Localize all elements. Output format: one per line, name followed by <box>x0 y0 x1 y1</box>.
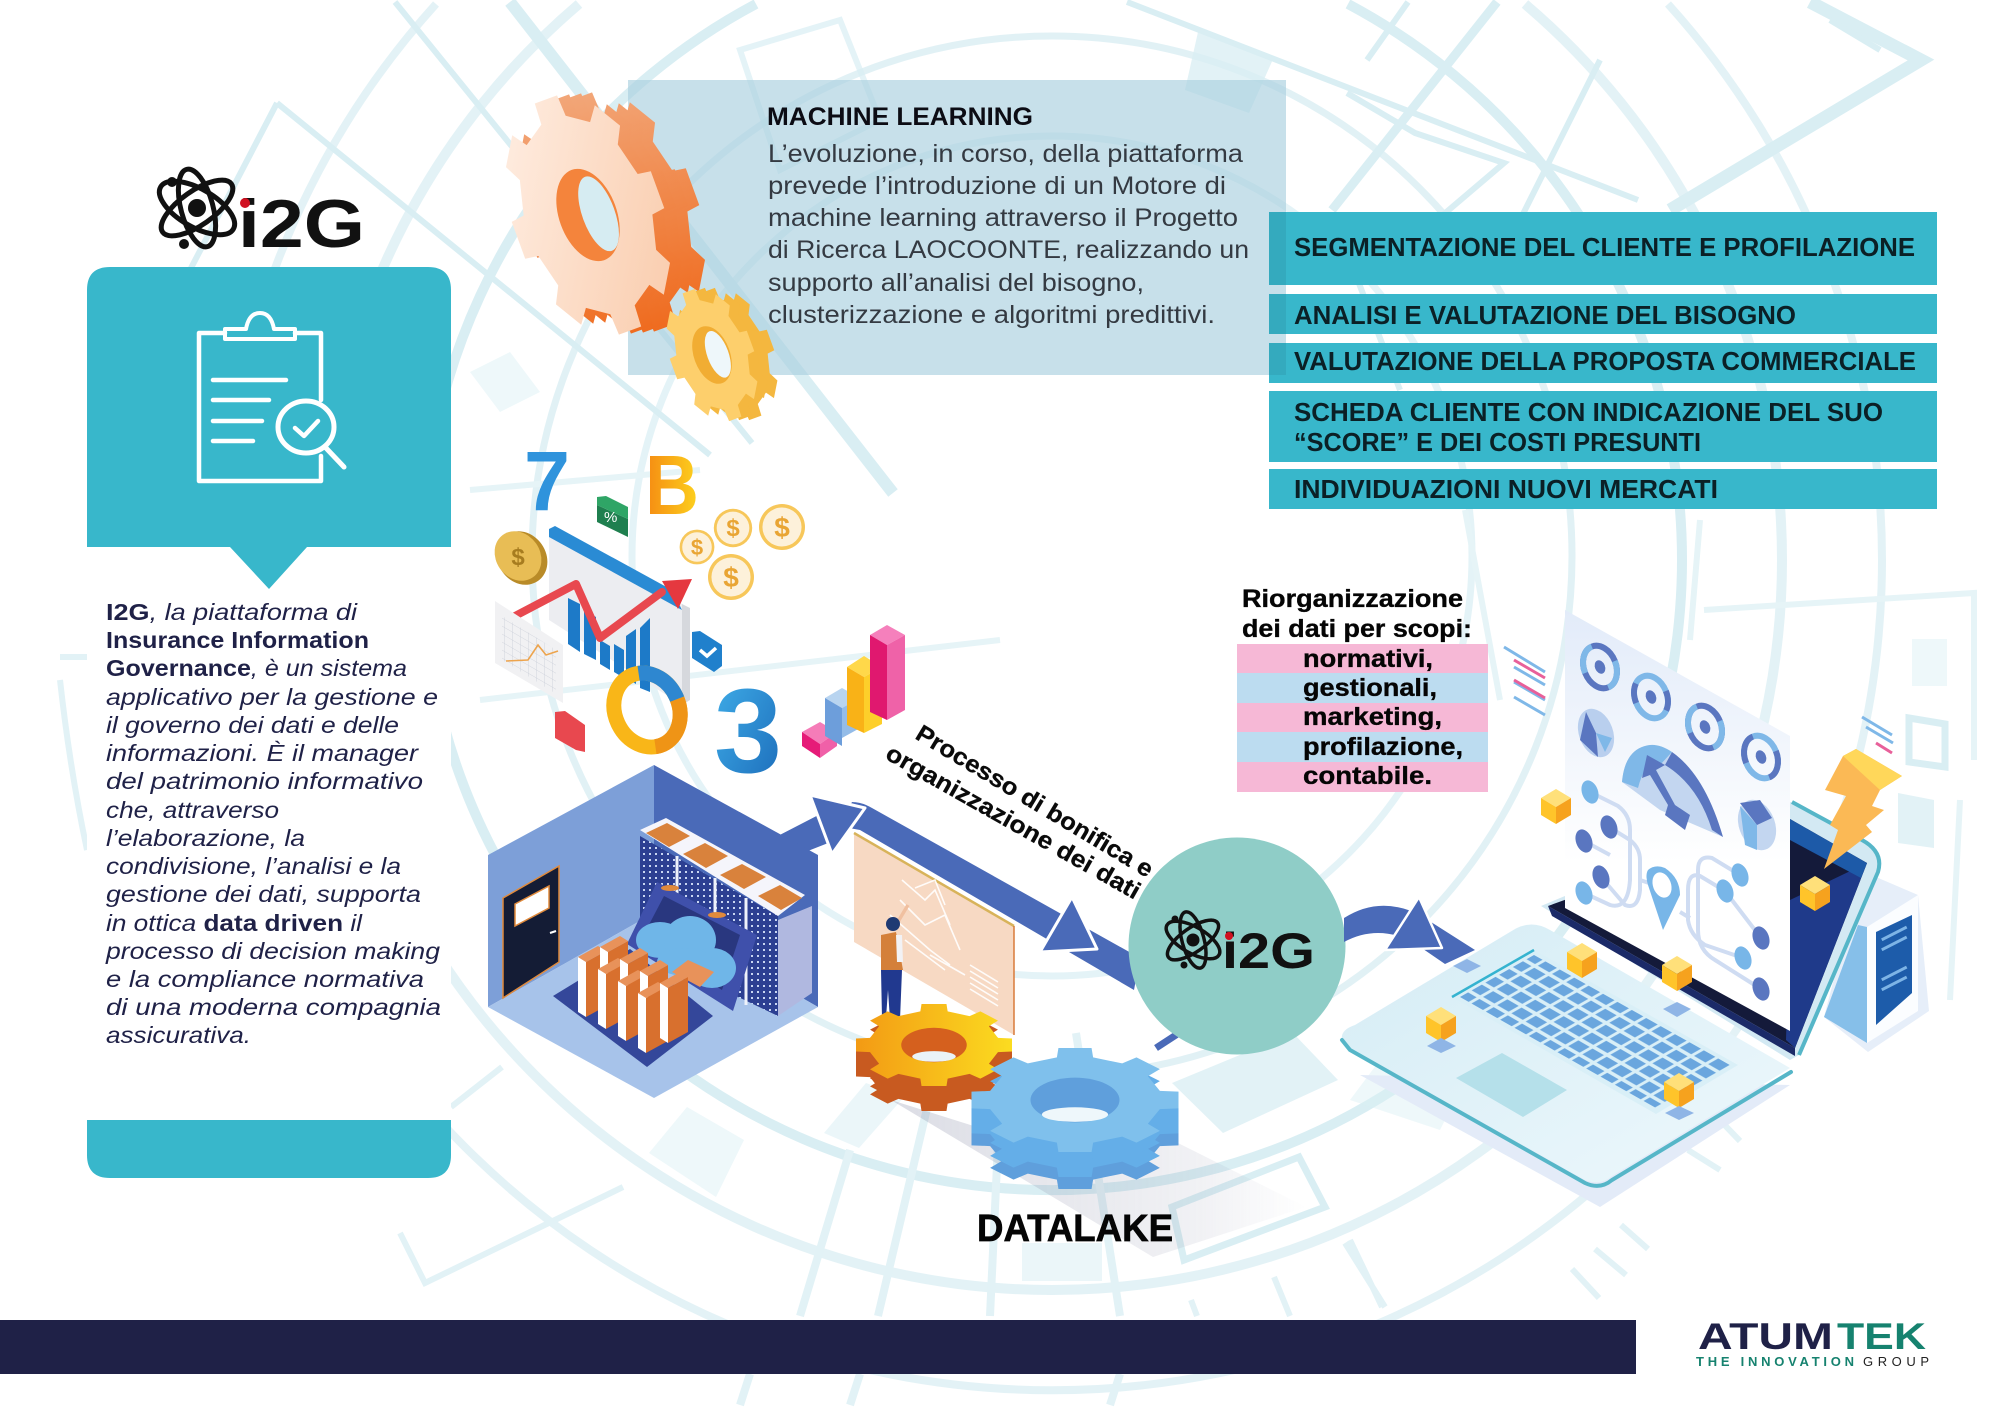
footer bar <box>0 1320 1636 1374</box>
text block: data reorganisation purposes: Riorganizzazione <box>1242 585 1463 613</box>
text block: I2G description: in ottica data driven il <box>106 910 363 936</box>
list: machine learning outputs: ANALISI E VALUTAZIONE DEL BISOGNO <box>1294 300 1796 330</box>
icon: percent chip <box>597 496 628 537</box>
laptop base <box>1342 924 1791 1207</box>
heading: machine learning: MACHINE LEARNING <box>767 103 1033 131</box>
icon: gauge <box>1622 745 1723 837</box>
logo: Atumtek <box>1696 1316 1929 1369</box>
text block: I2G description: informazioni. È il manager <box>106 740 420 766</box>
panel: I2G description <box>87 267 451 1178</box>
list: machine learning outputs: SEGMENTAZIONE DEL CLIENTE E PROFILAZIONE <box>1294 232 1915 262</box>
icons: pie charts <box>1571 704 1783 856</box>
chart: small line sheet <box>495 601 563 703</box>
list: machine learning outputs <box>1269 212 1937 509</box>
node: i2G circle: i2G <box>1222 923 1315 979</box>
icon: number 3: 3 <box>714 664 782 798</box>
text block: I2G description: assicurativa. <box>106 1022 251 1048</box>
list: machine learning outputs: VALUTAZIONE DELLA PROPOSTA COMMERCIALE <box>1294 346 1916 376</box>
icon: small yellow gear <box>650 276 794 433</box>
text block: I2G description <box>105 599 441 1048</box>
icon: lightning bolt <box>1824 749 1902 869</box>
floating dashboard sheet <box>1565 610 1790 1031</box>
arrow: process flow from data room to i2G <box>770 795 1196 1048</box>
icon: blue gear <box>972 1048 1178 1189</box>
label: data cleansing process: Processo di bonifica e <box>911 720 1158 883</box>
text block: I2G description: condivisione, l’analisi e la <box>106 853 401 879</box>
logo: Atumtek: TEK <box>1837 1316 1926 1357</box>
illustration: floating data charts <box>485 434 905 798</box>
illustration: laptop with dashboard <box>1342 610 1929 1207</box>
list: machine learning outputs: “SCORE” E DEI COSTI PRESUNTI <box>1294 427 1701 457</box>
text block: I2G description: Governance , è un sistema <box>106 655 407 681</box>
icon: orange gear <box>856 1004 1012 1111</box>
label: datalake: DATALAKE <box>977 1208 1173 1250</box>
text block: data reorganisation purposes: gestionali, <box>1303 674 1437 702</box>
icon: coins: $ <box>726 515 740 542</box>
icon: large orange gear <box>476 71 735 356</box>
icons: target rings <box>1577 641 1784 783</box>
text block: I2G description: del patrimonio informativo <box>106 768 423 794</box>
logo: Atumtek: GROUP <box>1863 1354 1929 1369</box>
icon: coins: $ <box>691 535 703 560</box>
text block: machine learning body: prevede l’introduzione di un Motore di <box>768 172 1226 200</box>
icon: check chip <box>692 631 722 672</box>
illustration: server racks <box>640 818 812 1016</box>
icon: red chip <box>555 711 585 752</box>
icon: door <box>503 866 559 998</box>
icon: gold coin: $ <box>511 544 525 571</box>
list: machine learning outputs: SCHEDA CLIENTE CON INDICAZIONE DEL SUO <box>1294 397 1883 427</box>
text block: machine learning body: supporto all’analisi del bisogno, <box>768 269 1144 297</box>
text block: I2G description: che, attraverso <box>106 797 279 823</box>
icon: coins: $ <box>774 512 790 543</box>
text block: I2G description: e la compliance normativa <box>106 966 424 992</box>
icon: server tower <box>1824 871 1929 1052</box>
logo: Atumtek: ATUM <box>1698 1316 1833 1357</box>
chart: donut ring <box>602 662 692 758</box>
text block: data reorganisation purposes: contabile. <box>1303 762 1432 790</box>
icons: decorative text lines <box>1504 647 1893 753</box>
icon: percent chip: % <box>604 509 617 526</box>
arrow: i2G to laptop <box>1344 897 1475 964</box>
icon: coins: $ <box>723 562 739 593</box>
text block: I2G description: applicativo per la gestione e <box>106 684 438 710</box>
icon: coins <box>680 504 805 600</box>
figure: person <box>881 905 908 1028</box>
illustration: person at circuit board <box>854 833 1014 1035</box>
illustration: data room <box>488 765 818 1098</box>
logo: i2G top <box>151 165 365 262</box>
text block: machine learning body: clusterizzazione e algoritmi predittivi. <box>768 301 1215 329</box>
shadow under datalake gears <box>891 1100 1306 1257</box>
icons: yellow cubes <box>1426 789 1830 1120</box>
text block: data reorganisation purposes: dei dati per scopi: <box>1242 615 1472 643</box>
text block: data reorganisation purposes <box>1237 585 1488 792</box>
logo: i2G top: i2G <box>238 186 365 262</box>
text block: I2G description: Insurance Information <box>106 627 369 653</box>
chart: isometric bars <box>802 625 905 758</box>
icon: number 7: 7 <box>524 434 570 528</box>
text block: I2G description: gestione dei dati, supporta <box>106 881 421 907</box>
label: data cleansing process: organizzazione dei dati <box>881 740 1145 905</box>
laptop lid <box>1541 802 1880 1060</box>
icon: letter B: B <box>645 438 699 532</box>
text block: machine learning body: L’evoluzione, in corso, della piattaforma <box>768 140 1243 168</box>
text block: I2G description: il governo dei dati e delle <box>106 712 399 738</box>
illustration: open case with cloud <box>553 882 757 1067</box>
text block: I2G description: di una moderna compagnia <box>106 994 441 1020</box>
text block: I2G description: l’elaborazione, la <box>106 825 305 851</box>
text block: I2G description: I2G , la piattaforma di <box>106 599 358 625</box>
text block: machine learning body: machine learning attraverso il Progetto <box>768 204 1238 232</box>
text block: data reorganisation purposes: marketing, <box>1303 703 1442 731</box>
flow diagram <box>1572 778 1773 1003</box>
text block: data reorganisation purposes: profilazione, <box>1303 733 1463 761</box>
icon: clipboard with magnifier <box>199 313 344 481</box>
node: i2G circle <box>1128 838 1346 1054</box>
list: machine learning outputs: INDIVIDUAZIONI NUOVI MERCATI <box>1294 474 1718 504</box>
logo: Atumtek: THE INNOVATION <box>1696 1354 1854 1369</box>
chart: dashboard window with bars <box>515 526 692 705</box>
panel: machine learning <box>628 80 1286 375</box>
text block: I2G description: processo di decision making <box>105 938 440 964</box>
text block: data reorganisation purposes: normativi, <box>1303 645 1433 673</box>
text block: machine learning body: di Ricerca LAOCOONTE, realizzando un <box>768 236 1249 264</box>
text block: machine learning body <box>768 140 1249 329</box>
icon: gold coin <box>485 521 558 595</box>
